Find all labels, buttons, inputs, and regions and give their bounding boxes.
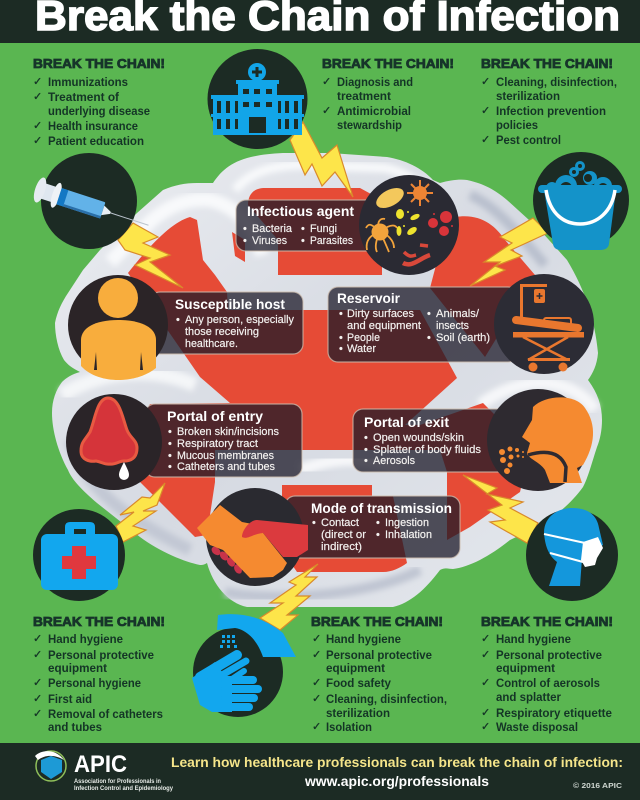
- panel: infectious agent: Viruses: [252, 235, 287, 247]
- actions: bottom left: equipment: [48, 661, 107, 675]
- actions: top centre: ✓: [322, 75, 331, 88]
- actions: top centre: Antimicrobial: [337, 104, 411, 118]
- panel: reservoir: People: [347, 332, 380, 344]
- icon: handshake: [197, 488, 308, 586]
- panel: portal of entry: Mucous membranes: [177, 450, 274, 462]
- actions: bottom left: BREAK THE CHAIN!: [33, 615, 165, 629]
- actions: bottom centre: equipment: [326, 661, 385, 675]
- red centre fields: [125, 188, 535, 572]
- actions: bottom left: Removal of catheters: [48, 707, 163, 721]
- bolt: mask: [463, 475, 538, 543]
- actions: bottom centre: ✓: [312, 720, 321, 733]
- actions: bottom centre: Food safety: [326, 676, 391, 690]
- copyright: © 2016 APIC: [573, 781, 623, 790]
- panel: portal of exit: Aerosols: [373, 455, 415, 467]
- actions: top right: Pest control: [496, 133, 561, 147]
- panel: portal of entry: •: [168, 438, 172, 450]
- actions: bottom right: equipment: [496, 661, 555, 675]
- icon: hospital: [208, 49, 308, 149]
- panel: mode of transmission: •: [376, 517, 380, 529]
- icon: APIC logo: [35, 751, 66, 781]
- icon: microbes: [359, 175, 459, 275]
- actions: bottom centre: ✓: [312, 692, 321, 705]
- actions: bottom right: Waste disposal: [496, 720, 578, 734]
- actions: bottom right: BREAK THE CHAIN!: [481, 615, 613, 629]
- panel: portal of exit: Open wounds/skin: [373, 432, 464, 444]
- actions: bottom centre: ✓: [312, 632, 321, 645]
- panel: infectious agent: •: [243, 223, 247, 235]
- panel: reservoir: Soil (earth): [436, 332, 490, 344]
- panel: infectious agent: •: [301, 223, 305, 235]
- actions: top right: BREAK THE CHAIN!: [481, 57, 613, 71]
- panel: reservoir: •: [339, 332, 343, 344]
- bolt: bucket: [470, 218, 548, 286]
- actions: bottom right: and splatter: [496, 690, 561, 704]
- actions: top left: underlying disease: [48, 104, 150, 118]
- title bar: [0, 0, 640, 43]
- actions: top right: ✓: [481, 75, 490, 88]
- actions: bottom right: Hand hygiene: [496, 632, 571, 646]
- panel: mode of transmission: indirect): [321, 541, 362, 553]
- actions: top centre: BREAK THE CHAIN!: [322, 57, 454, 71]
- icon: masked head: [526, 508, 618, 601]
- panel: infectious agent: Parasites: [310, 235, 353, 247]
- icon: nose: [66, 394, 162, 490]
- actions: bottom centre: Cleaning, disinfection,: [326, 692, 447, 706]
- panel: portal of exit: •: [364, 432, 368, 444]
- panel: susceptible host: those receiving: [185, 326, 259, 338]
- actions: top centre: treatment: [337, 89, 391, 103]
- bolt: first aid: [116, 483, 165, 542]
- panel: reservoir: Dirty surfaces: [347, 308, 414, 320]
- actions: bottom centre: Personal protective: [326, 648, 432, 662]
- actions: top left: ✓: [33, 90, 42, 103]
- actions: top centre: [322, 57, 454, 132]
- icon: person: [68, 275, 168, 380]
- actions: bottom centre: Hand hygiene: [326, 632, 401, 646]
- actions: top left: Health insurance: [48, 119, 138, 133]
- actions: bottom right: Personal protective: [496, 648, 602, 662]
- panel: portal of entry: Portal of entry: [167, 408, 263, 424]
- panel: infectious agent: [236, 200, 386, 251]
- icon: stretcher: [494, 274, 594, 374]
- panel: reservoir: and equipment: [347, 320, 421, 332]
- actions: bottom left: First aid: [48, 692, 92, 706]
- actions: bottom right: ✓: [481, 676, 490, 689]
- actions: bottom centre: ✓: [312, 648, 321, 661]
- actions: bottom right: ✓: [481, 648, 490, 661]
- panel: infectious agent: •: [301, 235, 305, 247]
- icon: head exhaling: [487, 389, 593, 491]
- panel: mode of transmission: (direct or: [321, 529, 366, 541]
- panel: reservoir: Animals/: [436, 308, 480, 320]
- panel: mode of transmission: [285, 496, 460, 558]
- panel: reservoir: •: [339, 343, 343, 355]
- call to action: Learn how healthcare professionals can break the chain of infection:: [171, 755, 623, 770]
- silver chain links: [52, 153, 602, 607]
- actions: bottom left: Personal protective: [48, 648, 154, 662]
- panel: portal of exit: •: [364, 444, 368, 456]
- url: www.apic.org/professionals: [304, 773, 489, 789]
- panel: portal of entry: •: [168, 426, 172, 438]
- panel: portal of exit: •: [364, 455, 368, 467]
- panel: portal of exit: Portal of exit: [364, 414, 449, 430]
- actions: bottom right: ✓: [481, 720, 490, 733]
- footer: [0, 743, 640, 800]
- panel: portal of entry: Catheters and tubes: [177, 461, 275, 473]
- panel: mode of transmission: Contact: [321, 517, 359, 529]
- panel: mode of transmission: Mode of transmission: [311, 500, 452, 516]
- actions: bottom left: ✓: [33, 648, 42, 661]
- panel: portal of entry: [145, 404, 302, 477]
- panel: portal of entry: Respiratory tract: [177, 438, 258, 450]
- actions: bottom centre: BREAK THE CHAIN!: [311, 615, 443, 629]
- actions: bottom left: and tubes: [48, 720, 102, 734]
- chain graphic: [52, 153, 602, 607]
- panel: portal of entry: •: [168, 461, 172, 473]
- actions: bottom left: ✓: [33, 707, 42, 720]
- panel: mode of transmission: Ingestion: [385, 517, 429, 529]
- actions: top left: ✓: [33, 134, 42, 147]
- actions: bottom right: Respiratory etiquette: [496, 706, 612, 720]
- actions: top left: ✓: [33, 75, 42, 88]
- bolt: hospital: [290, 122, 353, 197]
- icon: syringe: [31, 153, 152, 249]
- actions: bottom centre: ✓: [312, 676, 321, 689]
- footer: Infection Control and Epidemiology: [74, 785, 173, 792]
- actions: top left: ✓: [33, 119, 42, 132]
- panel: portal of entry: •: [168, 450, 172, 462]
- actions: top left: Patient education: [48, 134, 144, 148]
- actions: top left: Immunizations: [48, 75, 128, 89]
- actions: top right: Infection prevention: [496, 104, 606, 118]
- panel: mode of transmission: •: [312, 517, 316, 529]
- panel: reservoir: Reservoir: [337, 290, 401, 306]
- actions: bottom centre: sterilization: [326, 706, 390, 720]
- panel: susceptible host: [150, 292, 303, 354]
- actions: top right: ✓: [481, 104, 490, 117]
- actions: bottom right: [481, 615, 613, 734]
- panel: reservoir: •: [427, 332, 431, 344]
- panel: susceptible host: Susceptible host: [175, 296, 285, 312]
- actions: bottom left: ✓: [33, 692, 42, 705]
- panel: infectious agent: Infectious agent: [247, 203, 354, 219]
- panel: portal of entry: Broken skin/incisions: [177, 426, 279, 438]
- panel: portal of exit: [353, 409, 513, 472]
- actions: top right: policies: [496, 118, 538, 132]
- actions: bottom left: Personal hygiene: [48, 676, 141, 690]
- actions: top centre: Diagnosis and: [337, 75, 413, 89]
- bolt: hand washing: [260, 564, 318, 630]
- actions: top right: ✓: [481, 133, 490, 146]
- icon: bucket: [533, 152, 629, 250]
- panel: infectious agent: Fungi: [310, 223, 337, 235]
- actions: bottom left: Hand hygiene: [48, 632, 123, 646]
- actions: bottom right: Control of aerosols: [496, 676, 600, 690]
- actions: top left: [33, 57, 165, 148]
- actions: bottom centre: Isolation: [326, 720, 372, 734]
- actions: top left: Treatment of: [48, 90, 120, 104]
- panel: infectious agent: Bacteria: [252, 223, 293, 235]
- panel: reservoir: Water: [347, 343, 376, 355]
- actions: top centre: ✓: [322, 104, 331, 117]
- actions: top centre: stewardship: [337, 118, 402, 132]
- panel: mode of transmission: Inhalation: [385, 529, 432, 541]
- panel: reservoir: insects: [436, 320, 469, 332]
- panel: infectious agent: •: [243, 235, 247, 247]
- actions: bottom left: ✓: [33, 676, 42, 689]
- icon: hand washing: [192, 614, 296, 717]
- actions: bottom right: ✓: [481, 706, 490, 719]
- panel: mode of transmission: •: [376, 529, 380, 541]
- APIC wordmark: APIC: [74, 751, 127, 778]
- panel: susceptible host: Any person, especially: [185, 314, 294, 326]
- panel: susceptible host: healthcare.: [185, 338, 238, 350]
- panel: reservoir: •: [427, 308, 431, 320]
- actions: bottom left: ✓: [33, 632, 42, 645]
- actions: bottom left: [33, 615, 165, 734]
- actions: bottom centre: [311, 615, 447, 734]
- panel: susceptible host: •: [176, 314, 180, 326]
- actions: bottom right: ✓: [481, 632, 490, 645]
- actions: top right: [481, 57, 617, 147]
- panel: reservoir: •: [339, 308, 343, 320]
- panel: reservoir: [328, 287, 518, 362]
- actions: top right: Cleaning, disinfection,: [496, 75, 617, 89]
- actions: top left: BREAK THE CHAIN!: [33, 57, 165, 71]
- icon: first aid kit: [33, 509, 125, 601]
- actions: top right: sterilization: [496, 89, 560, 103]
- panel: portal of exit: Splatter of body fluids: [373, 444, 481, 456]
- APIC full name: Association for Professionals in: [74, 778, 161, 785]
- bolt: syringe: [118, 223, 183, 288]
